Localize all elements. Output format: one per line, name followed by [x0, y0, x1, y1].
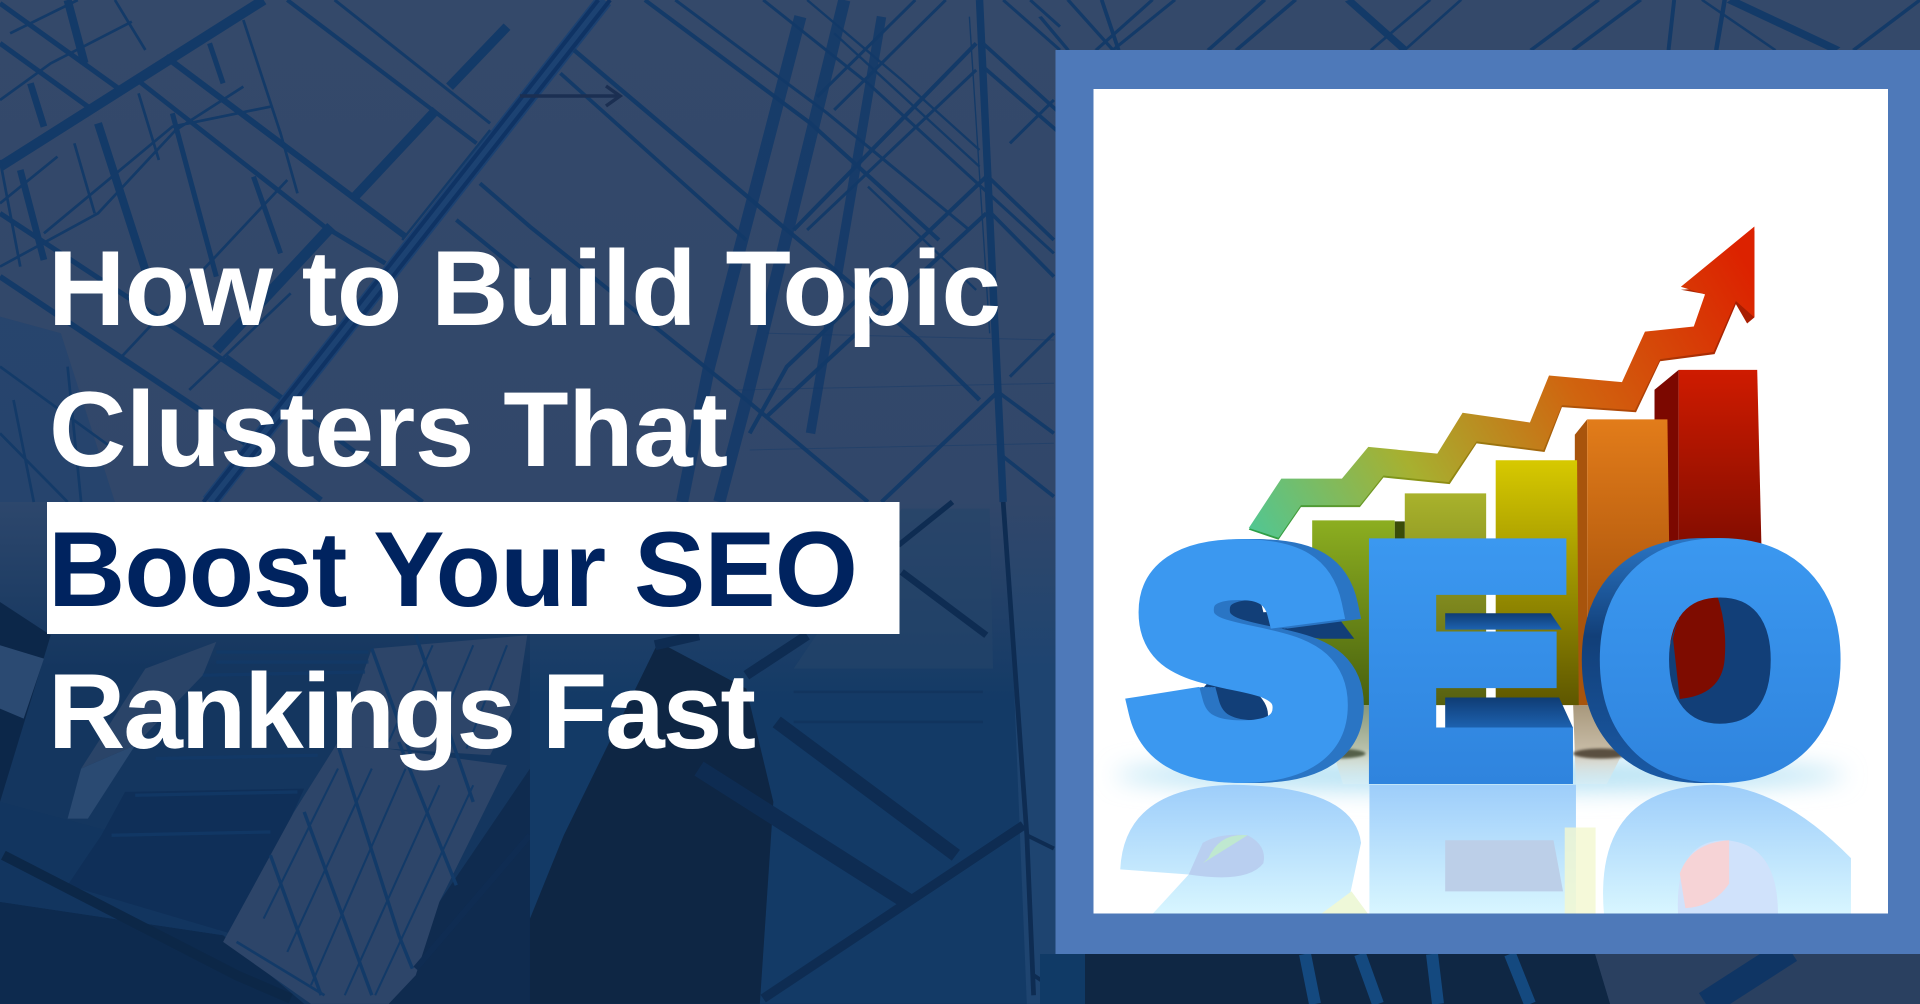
- title line 2: Clusters That: [49, 369, 728, 489]
- lower-centre dark beams: [530, 502, 1060, 1004]
- title line 1: How to Build Topic: [48, 228, 1001, 348]
- bar 3 yellow: [1496, 460, 1579, 705]
- icon: small dark arrow in background: [520, 86, 620, 106]
- letter S extrusion: S: [1151, 493, 1360, 830]
- title line 4: Rankings Fast: [48, 651, 756, 771]
- letter S extrusion: S: [1142, 493, 1351, 830]
- bar 4 orange: [1575, 419, 1671, 705]
- lattice above the frame: [1040, 0, 1920, 50]
- letter S extrusion: S: [1148, 493, 1357, 830]
- panel: blue image frame: [1056, 50, 1920, 954]
- letter O face: O: [1599, 487, 1842, 835]
- lower-right pane below the frame: [1040, 950, 1920, 1004]
- upper-centre lattice: [530, 0, 1060, 502]
- letter S extrusion: [1200, 539, 1364, 783]
- letter O extrusion: O: [1596, 487, 1839, 835]
- reflection: floor mirror of the letters: [1120, 785, 1851, 914]
- lower-left building panes: [0, 554, 530, 1004]
- letter O extrusion: O: [1593, 487, 1836, 835]
- letter E face: E: [1357, 477, 1576, 844]
- letter O extrusion: O: [1581, 487, 1824, 835]
- bars: [1312, 370, 1762, 705]
- illustration: SEO growth chart: [1115, 227, 1851, 914]
- title line 3 highlighted: Boost Your SEO: [48, 509, 858, 629]
- letter O extrusion: [1582, 538, 1733, 783]
- letter O extrusion: O: [1585, 487, 1828, 835]
- heading: title text: [47, 228, 1001, 771]
- bar 5 red: [1654, 370, 1762, 643]
- bar 1 green: [1312, 520, 1405, 705]
- reflection of third letter: [1603, 785, 1851, 914]
- arrow face: [1249, 227, 1754, 538]
- reflection of second letter: [1369, 785, 1596, 914]
- arrow side shading: [1249, 231, 1754, 540]
- bar 2 olive: [1405, 493, 1486, 705]
- O inner wall with red bar seen through: [1669, 598, 1770, 724]
- E depth facets: [1445, 613, 1573, 728]
- reflection of first letter: [1120, 785, 1368, 914]
- floor glow: [1115, 759, 1845, 791]
- floor between letters: [1336, 705, 1624, 784]
- S inner shadows: [1204, 600, 1354, 720]
- letter S extrusion: S: [1139, 493, 1348, 830]
- highlight box: [47, 502, 900, 634]
- upper-left lattice: [0, 0, 610, 502]
- arrow: rising zigzag trend line: [1249, 227, 1754, 540]
- panel: white picture area: [1094, 89, 1888, 914]
- letter S face: S: [1135, 493, 1344, 830]
- letter S extrusion: S: [1145, 493, 1354, 830]
- letter O extrusion: O: [1589, 487, 1832, 835]
